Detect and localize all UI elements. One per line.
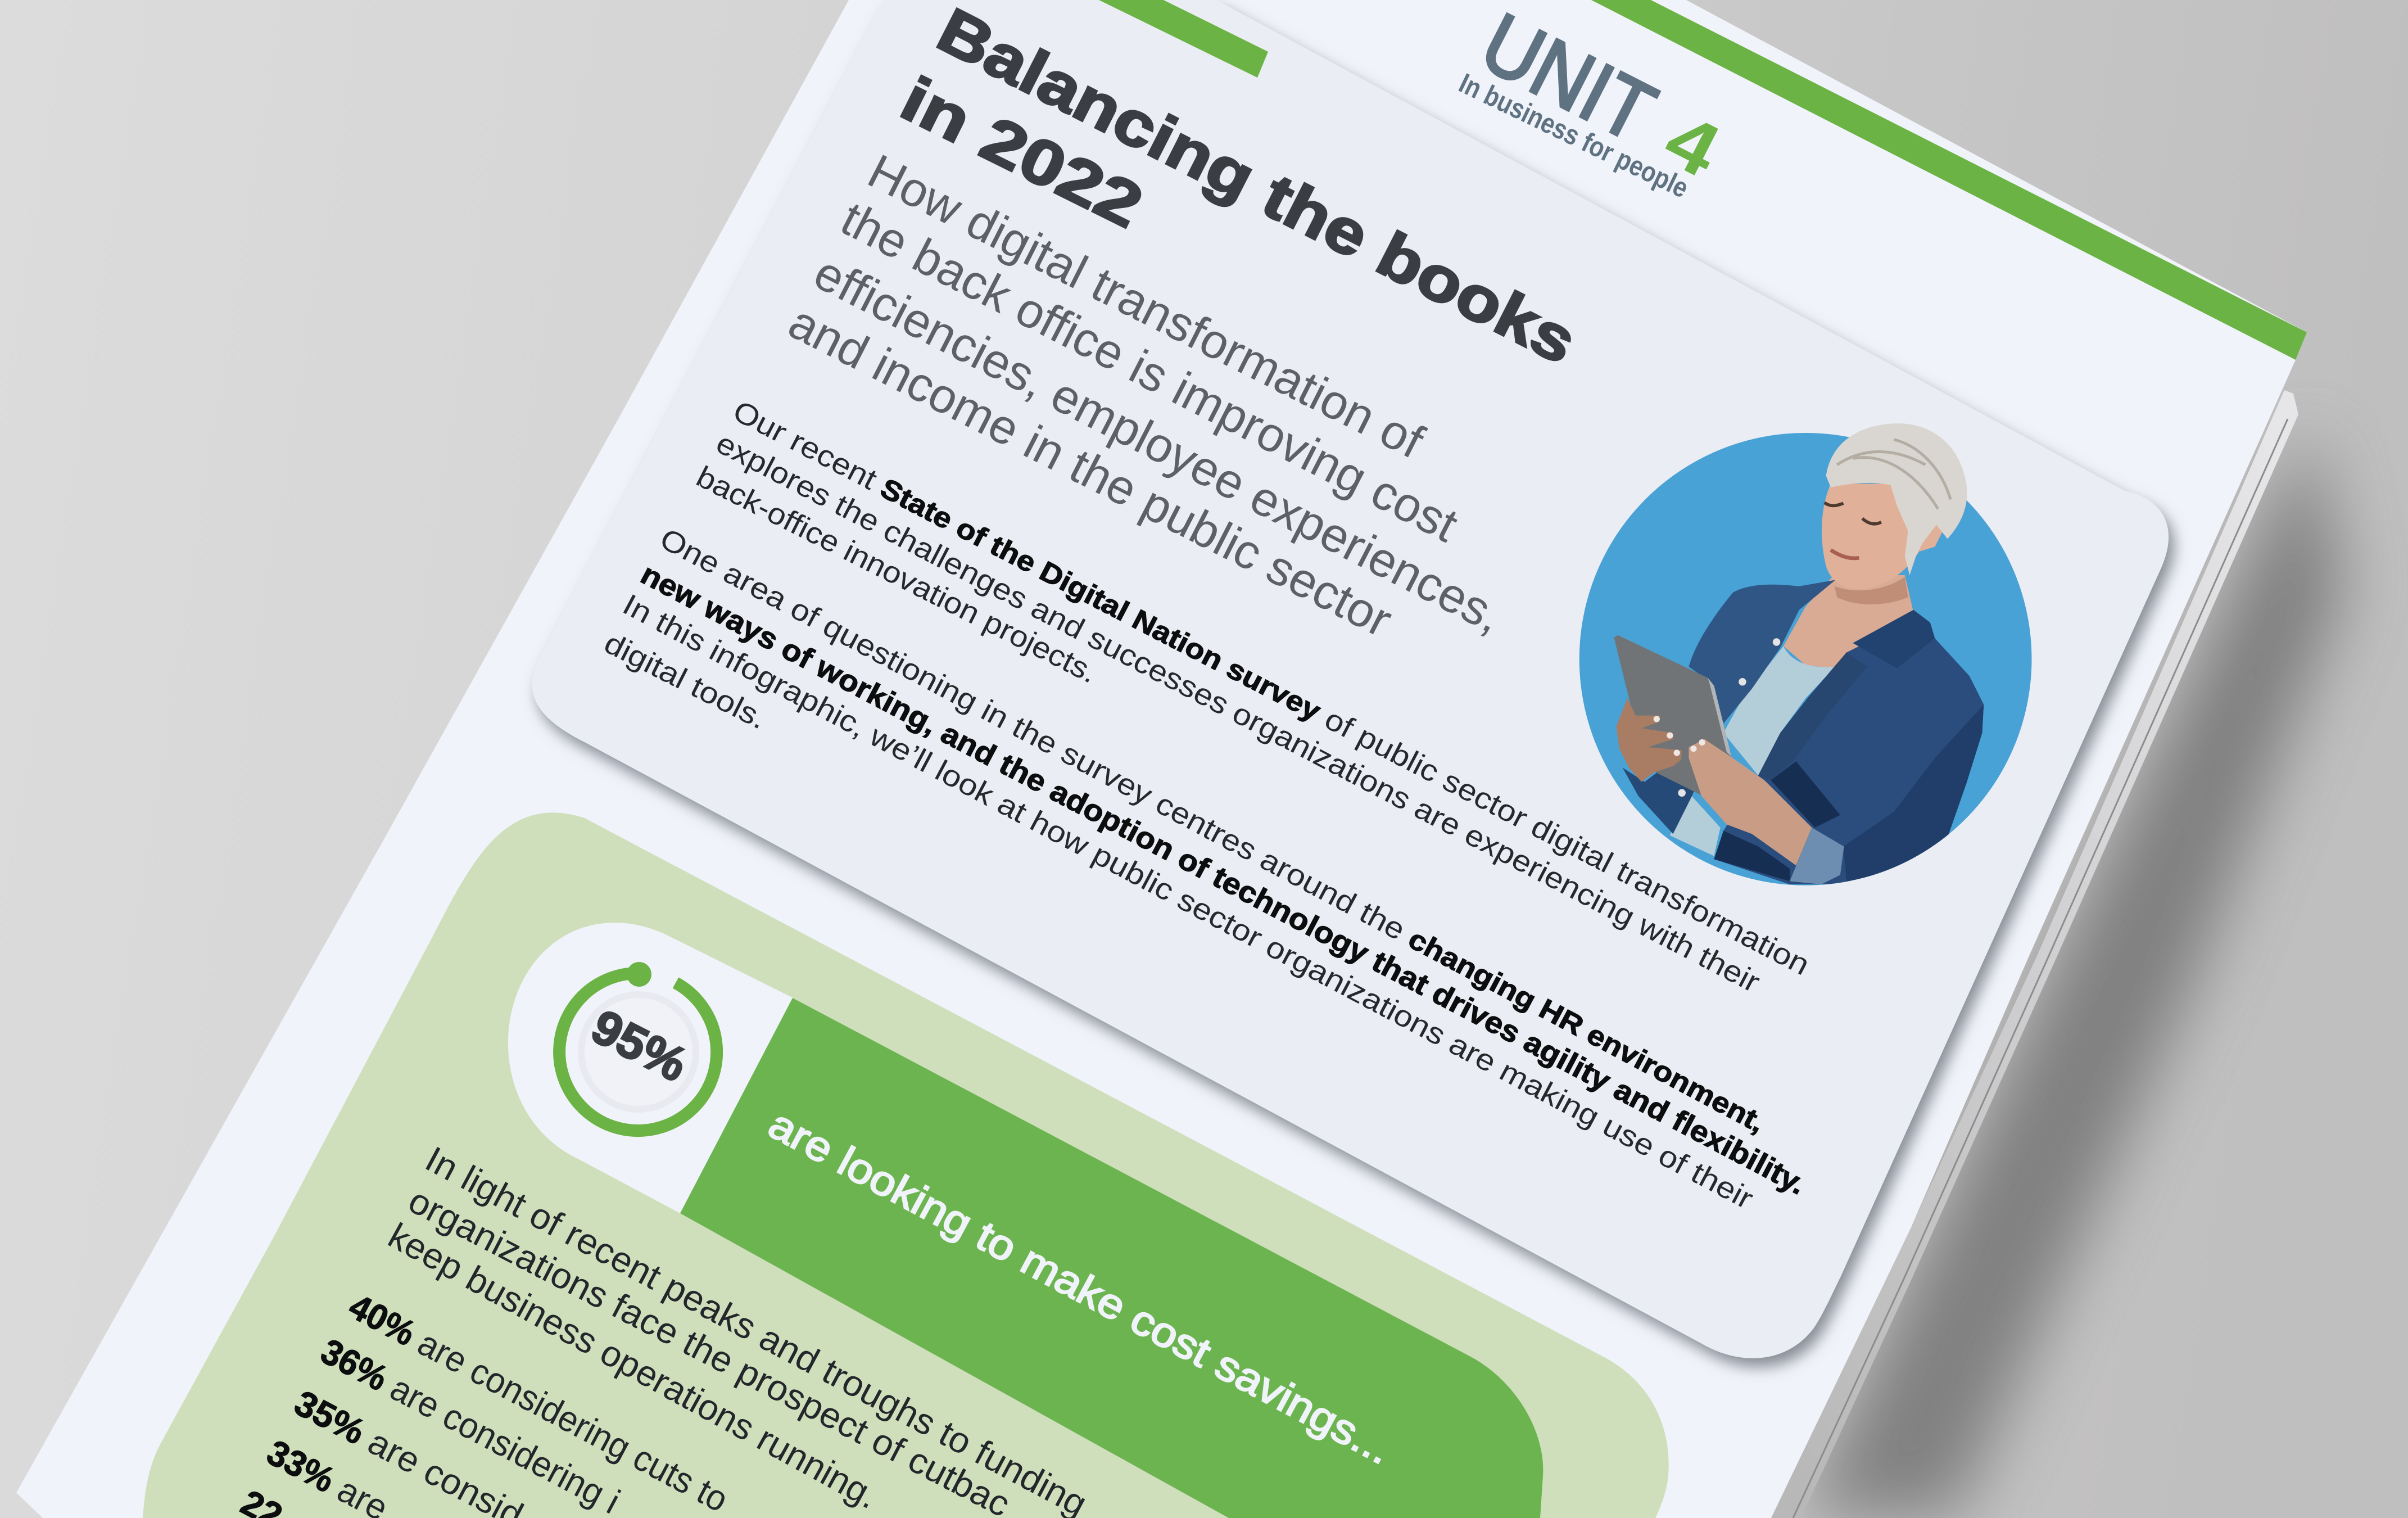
- body paragraph 1: back-office innovation projects.: [691, 460, 1102, 690]
- banner text: are looking to make cost savings...: [761, 1100, 1400, 1473]
- panel: cost savings: [143, 812, 1669, 1518]
- right hand: [1689, 739, 1812, 865]
- jacket lower left: [1623, 767, 1695, 834]
- eyes: [1825, 503, 1881, 524]
- hair: [1826, 423, 1967, 575]
- blue circle: [1579, 433, 2032, 885]
- intro text over panel: keep business operations running.: [382, 1215, 885, 1516]
- face: [1822, 484, 1944, 589]
- mouth: [1831, 550, 1859, 558]
- jacket left panel: [1689, 580, 1835, 724]
- tablet edge: [1708, 677, 1731, 757]
- jacket buttons: [1682, 642, 1777, 793]
- subtitle: efficiencies, employee experiences,: [805, 246, 1511, 643]
- jacket sleeve shading: [1843, 704, 1984, 881]
- logo numeral: 4: [1652, 96, 1733, 193]
- body paragraph 2: new ways of working, and the adoption of technology that drives agility and flexibility.: [635, 557, 1811, 1201]
- gauge centre: [578, 991, 699, 1113]
- left hand: [1616, 698, 1682, 782]
- jacket placket: [1758, 653, 1867, 780]
- panel: intro card: [532, 0, 2169, 1358]
- page stack seam: [1793, 419, 2288, 1518]
- body paragraph 2: In this infographic, we’ll look at how public sector organizations are making use of their: [617, 588, 1759, 1216]
- dark green banner: [680, 998, 1543, 1518]
- gauge inner: [585, 998, 692, 1106]
- gauge value: 95%: [583, 999, 696, 1092]
- collar: [1853, 610, 1935, 668]
- nails: [1656, 719, 1702, 753]
- neck and chest: [1784, 575, 1914, 668]
- body paragraph 2: One area of questioning in the survey centres around the changing HR environment,: [654, 522, 1771, 1139]
- white pill behind gauge: [508, 923, 793, 1213]
- card background: [532, 0, 2169, 1358]
- page stack edge: [1765, 390, 2298, 1518]
- subtitle: How digital transformation of: [859, 144, 1432, 469]
- light green panel background: [143, 812, 1669, 1518]
- logo wordmark: UNIT: [1467, 0, 1669, 160]
- photo: woman with tablet in blue circle: [1579, 423, 2032, 885]
- cuff: [1790, 828, 1844, 884]
- top-left green tab: [1099, 0, 1268, 78]
- intro text over panel: In light of recent peaks and troughs to funding: [419, 1138, 1093, 1518]
- subtitle: the back office is improving cost: [832, 192, 1466, 553]
- gauge arc: [559, 973, 717, 1131]
- gauge end dot: [627, 962, 651, 987]
- person: [1614, 423, 1984, 884]
- body paragraph 1: Our recent State of the Digital Nation survey of public sector digital transformation: [727, 394, 1815, 982]
- tablet: [1614, 635, 1731, 796]
- t-shirt: [1670, 646, 1835, 856]
- heading: in 2022: [890, 64, 1153, 241]
- logo tagline: In business for people: [1454, 67, 1693, 204]
- subtitle: and income in the public sector: [780, 295, 1400, 648]
- body paragraph 1: explores the challenges and successes organizations are experiencing with their: [710, 426, 1765, 999]
- jacket right panel: [1714, 610, 1984, 884]
- neck shadow: [1835, 577, 1908, 604]
- body paragraph 2: digital tools.: [599, 626, 772, 736]
- top green edge strip: [1591, 0, 2307, 360]
- heading: Balancing the books: [927, 0, 1587, 377]
- logo: Unit4: [1454, 0, 1733, 204]
- shadow cast by the brochure: [1801, 427, 2344, 1518]
- jacket dark fold: [1714, 761, 1840, 881]
- gauge: 95%: [559, 962, 717, 1131]
- intro text over panel: organizations face the prospect of cutbac: [402, 1180, 1017, 1518]
- hair highlights: [1837, 440, 1950, 509]
